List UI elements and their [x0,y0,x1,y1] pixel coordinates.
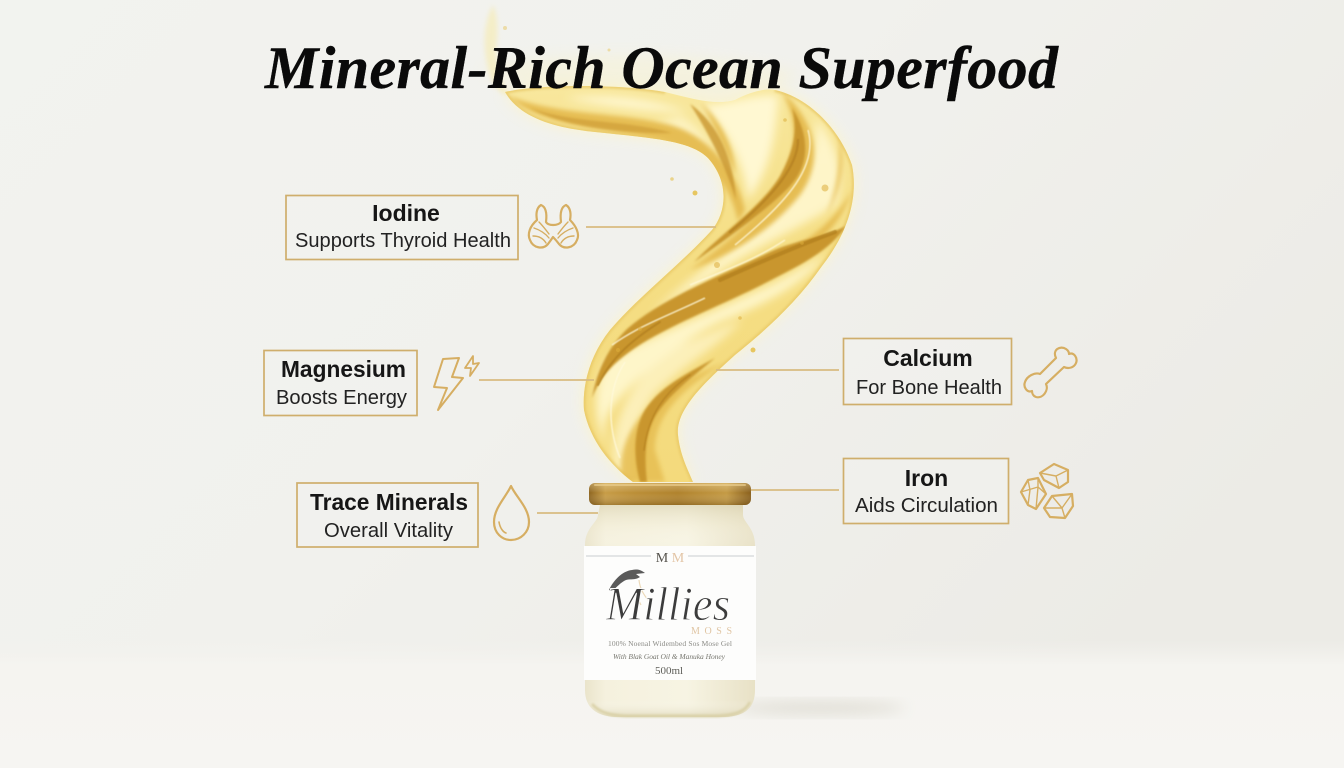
icon: thyroid [529,205,578,247]
soft gold edge [505,86,854,482]
callout: iron: Aids Circulation [855,494,998,517]
callout: trace minerals [297,483,478,547]
icon: bone [1024,348,1077,397]
golden oil swirl [480,5,880,490]
callout: magnesium [264,350,417,416]
callout: calcium [844,338,1012,404]
jar lid [589,483,751,505]
dark amber streaks [530,104,846,482]
deep amber core lines [598,140,835,450]
callout: iodine: Iodine [372,200,440,226]
jar label: M [656,551,669,566]
callout: iodine [286,196,518,260]
callout: calcium: For Bone Health [856,376,1002,399]
icon: mineral crystals [1021,464,1073,518]
callout: iron [844,458,1008,524]
icon: water drop [494,486,529,540]
jar label: M [672,551,685,566]
label hand mark [609,569,645,591]
callout: calcium: Calcium [883,345,973,371]
jar label: MOSS [691,626,732,637]
jar label [584,546,756,680]
jar label: With Blak Goat Oil & Manuka Honey [613,652,726,661]
icon: lightning bolts [434,356,479,410]
fine highlight lines [611,130,810,458]
connector: iron [751,489,839,491]
bubbles [616,118,828,352]
callout: trace minerals: Overall Vitality [324,519,454,542]
jar label: Millies [605,578,730,631]
callout: magnesium: Magnesium [281,356,406,382]
connector: magnesium [479,379,594,381]
callout: trace minerals: Trace Minerals [310,489,468,515]
mid gold streaks [508,92,852,482]
jar shadow [735,701,905,715]
product jar [584,483,756,717]
droplets [503,26,756,352]
jar label: 500ml [655,665,683,677]
jar body [585,505,755,717]
connector: trace minerals [537,512,598,514]
pale highlights [565,95,840,482]
connector: calcium [716,369,839,371]
title: Mineral-Rich Ocean Superfood [264,35,1059,101]
callout: iron: Iron [905,465,948,491]
connector: iodine [586,226,716,228]
jar label: 100% Noenal Widembed Sos Mose Gel [608,639,732,648]
callout: iodine: Supports Thyroid Health [295,229,511,252]
callout: magnesium: Boosts Energy [276,386,408,409]
